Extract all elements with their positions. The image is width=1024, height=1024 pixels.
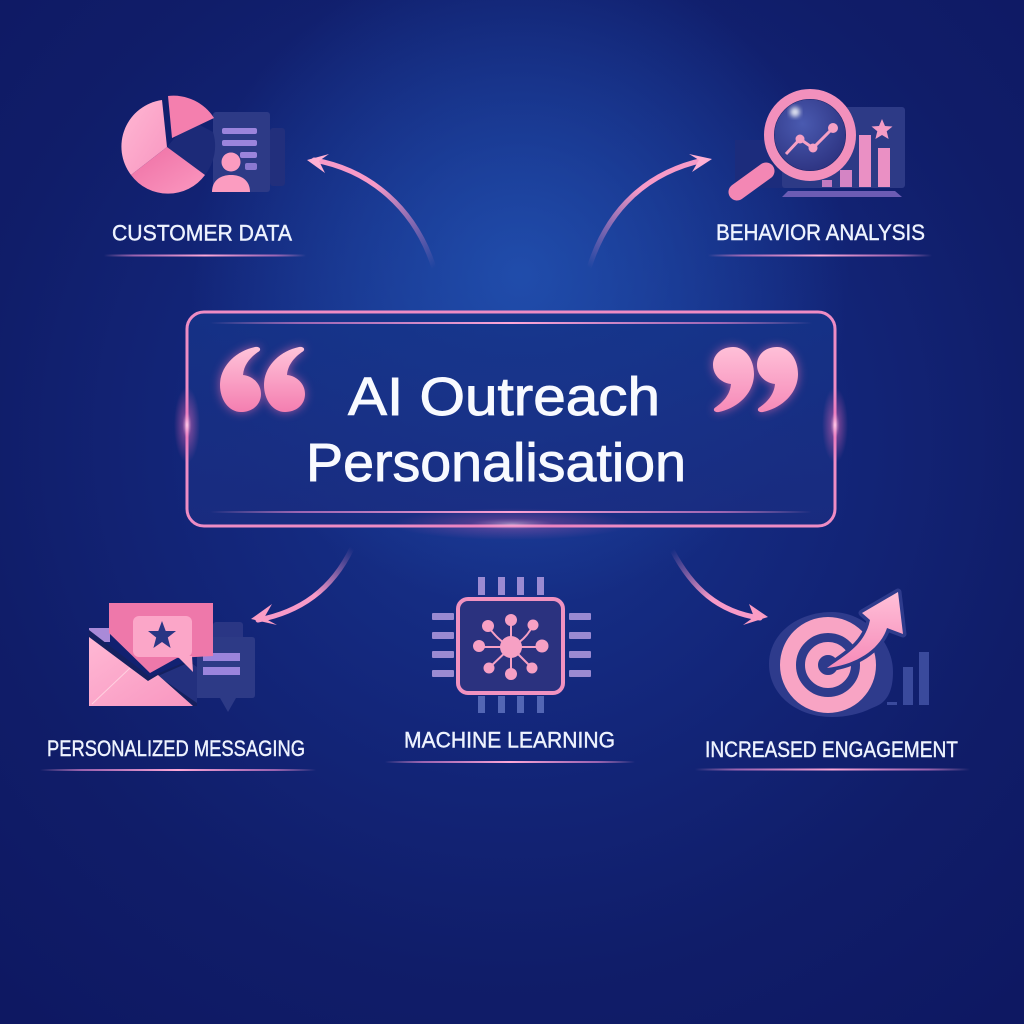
panel: personalized messaging: [40, 603, 316, 771]
arrow: to behavior analysis: [589, 154, 712, 268]
heading: Personalisation: [306, 433, 686, 493]
icon: neural network chip: [432, 577, 591, 713]
panel: central title: [174, 312, 848, 540]
arrow: to customer data: [307, 154, 434, 268]
label: PERSONALIZED MESSAGING: [47, 736, 305, 761]
label: INCREASED ENGAGEMENT: [705, 737, 958, 762]
label: CUSTOMER DATA: [112, 220, 292, 246]
label: BEHAVIOR ANALYSIS: [716, 220, 925, 245]
arrow: to personalized messaging: [251, 548, 352, 625]
icon: pie chart and profile card: [121, 96, 285, 194]
icon: target with rising arrow: [769, 592, 929, 717]
panel: customer data: [104, 96, 306, 256]
icon: envelope with chat bubbles: [89, 603, 255, 712]
icon: closing quote mark: [713, 347, 798, 412]
icon: magnifier over bar chart: [735, 94, 905, 197]
icon: opening quote mark: [220, 347, 305, 412]
panel: behavior analysis: [708, 94, 932, 256]
label: MACHINE LEARNING: [404, 728, 615, 752]
panel: increased engagement: [695, 592, 970, 770]
heading: AI Outreach: [348, 367, 660, 427]
panel: machine learning: [385, 577, 635, 763]
heading: [306, 367, 686, 493]
arrow: to increased engagement: [672, 550, 768, 625]
